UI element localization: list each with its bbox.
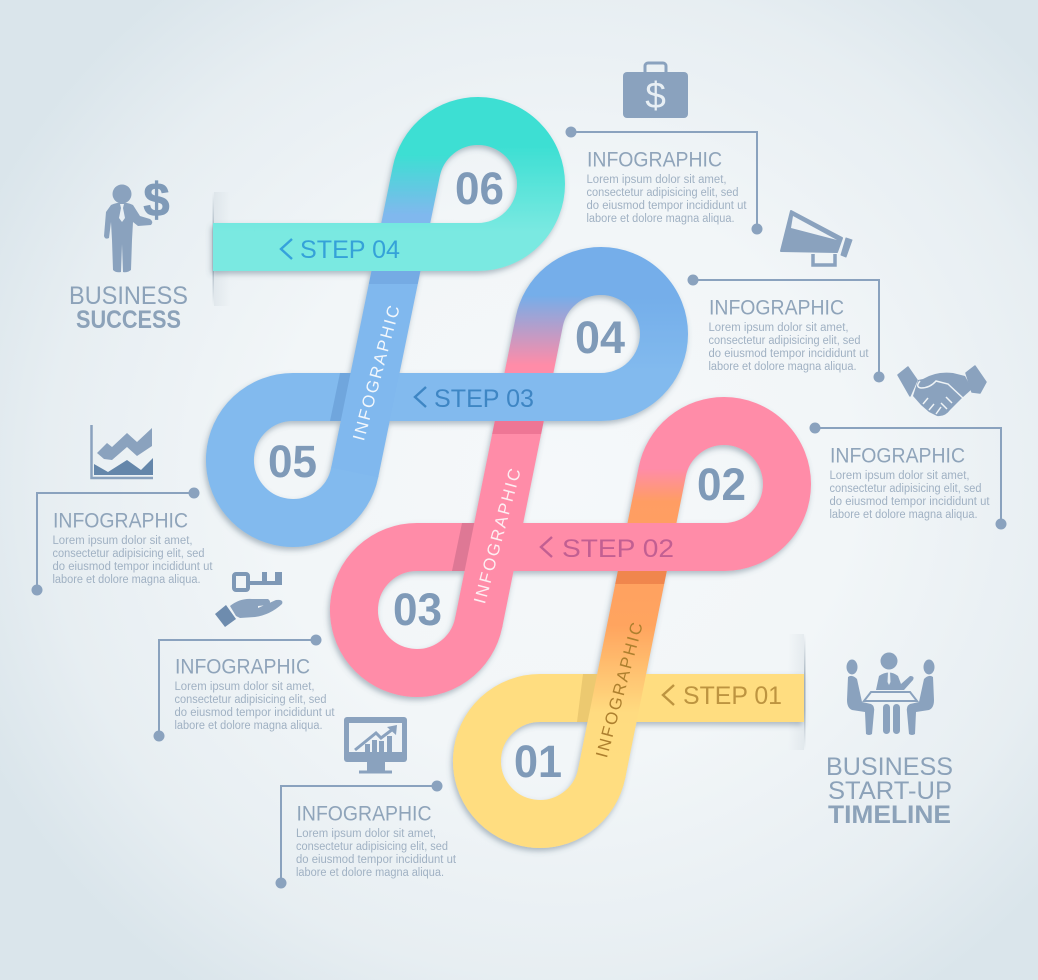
info block: bottom: INFOGRAPHIC (296, 802, 432, 826)
info block: left middle: Lorem ipsum dolor sit amet, (174, 681, 314, 693)
info block: top: consectetur adipisicing elit, sed (586, 187, 738, 199)
info block: bottom: consectetur adipisicing elit, sed (296, 841, 448, 853)
info block: left upper (32, 488, 213, 596)
right wall slit (788, 634, 806, 750)
info block: third: labore et dolore magna aliqua. (830, 509, 978, 521)
info block: third: consectetur adipisicing elit, sed (830, 483, 982, 495)
icon: meeting of three people (846, 652, 934, 735)
info block: bottom: labore et dolore magna aliqua. (296, 867, 444, 879)
label: step 03: STEP 03 (434, 385, 534, 413)
heading: business success (69, 282, 188, 334)
ribbon: slant from loop 03 to loop 04 (479, 271, 602, 622)
icon: businessman with dollar (104, 173, 170, 272)
heading: business start-up timeline (826, 753, 953, 829)
number 05: 05 (268, 436, 317, 487)
slant label: infographic orange: INFOGRAPHIC (592, 621, 647, 760)
info block: left middle: consectetur adipisicing elit, sed (174, 694, 326, 706)
label: step 04: STEP 04 (300, 236, 400, 264)
icon: briefcase with dollar: $ (645, 75, 666, 116)
info block: second: labore et dolore magna aliqua. (708, 361, 856, 373)
icon: businessman with dollar: $ (143, 173, 170, 226)
info block: left middle: INFOGRAPHIC (175, 656, 310, 678)
info block: top: do eiusmod tempor incididunt ut (586, 200, 747, 212)
info block: third: INFOGRAPHIC (830, 444, 965, 468)
heading: business start-up timeline: START-UP (828, 777, 952, 805)
icon: megaphone (781, 211, 852, 265)
ribbon: slant from loop 05 to loop 06 (355, 121, 479, 472)
label: step 01: STEP 01 (683, 682, 782, 710)
heading: business success: BUSINESS (69, 282, 188, 310)
info block: left upper: Lorem ipsum dolor sit amet, (52, 535, 192, 547)
info block: second: do eiusmod tempor incididunt ut (708, 348, 869, 360)
ribbon: step 01 band and loop 01 (477, 698, 804, 824)
info block: left middle: do eiusmod tempor incididunt ut (174, 707, 335, 719)
ribbon: loop 06 and step 04 band (213, 121, 541, 247)
info block: top (566, 126, 762, 234)
info block: left upper: labore et dolore magna aliqua. (52, 574, 200, 586)
info block: left middle: labore et dolore magna aliqua. (174, 720, 322, 732)
ribbon: loop 04, step 03 band and loop 05 (230, 271, 664, 523)
info block: left upper: INFOGRAPHIC (53, 510, 188, 532)
info block: second: INFOGRAPHIC (709, 296, 844, 320)
info block: left upper: do eiusmod tempor incididunt ut (52, 561, 213, 573)
slant label: infographic pink: INFOGRAPHIC (470, 467, 525, 606)
heading: business success: SUCCESS (76, 306, 181, 334)
info block: top: INFOGRAPHIC (587, 148, 722, 172)
number 02: 02 (697, 459, 746, 510)
number 06: 06 (455, 163, 504, 214)
icon: monitor chart (344, 717, 407, 774)
info block: second: Lorem ipsum dolor sit amet, (708, 322, 848, 334)
number 04: 04 (575, 312, 625, 363)
icon: hand with key (215, 572, 282, 627)
number 01: 01 (514, 736, 562, 787)
slant label: infographic blue: INFOGRAPHIC (349, 304, 404, 443)
info block: top: labore et dolore magna aliqua. (586, 213, 734, 225)
info block: third (810, 422, 1006, 530)
icon: handshake (898, 366, 986, 416)
label: step 02: STEP 02 (562, 535, 674, 563)
icon: briefcase with dollar (623, 63, 688, 118)
info block: left middle (154, 634, 335, 742)
number 03: 03 (393, 584, 442, 635)
info block: top: Lorem ipsum dolor sit amet, (586, 174, 726, 186)
info block: third: Lorem ipsum dolor sit amet, (830, 470, 970, 482)
info block: bottom: Lorem ipsum dolor sit amet, (296, 828, 436, 840)
heading: business start-up timeline: TIMELINE (828, 801, 951, 829)
heading: business start-up timeline: BUSINESS (826, 753, 953, 781)
ribbon: slant from loop 01 to loop 02 (602, 421, 725, 774)
left wall slit (212, 192, 230, 306)
looping ribbon (213, 121, 804, 824)
info block: bottom (276, 780, 457, 888)
icon: line chart (92, 425, 153, 478)
ribbon: loop 02, step 02 band and loop 03 (354, 421, 787, 673)
info block: bottom: do eiusmod tempor incididunt ut (296, 854, 457, 866)
info block: second: consectetur adipisicing elit, sed (708, 335, 860, 347)
info block: left upper: consectetur adipisicing elit, sed (52, 548, 204, 560)
info block: third: do eiusmod tempor incididunt ut (830, 496, 990, 508)
info block: second (688, 274, 884, 382)
